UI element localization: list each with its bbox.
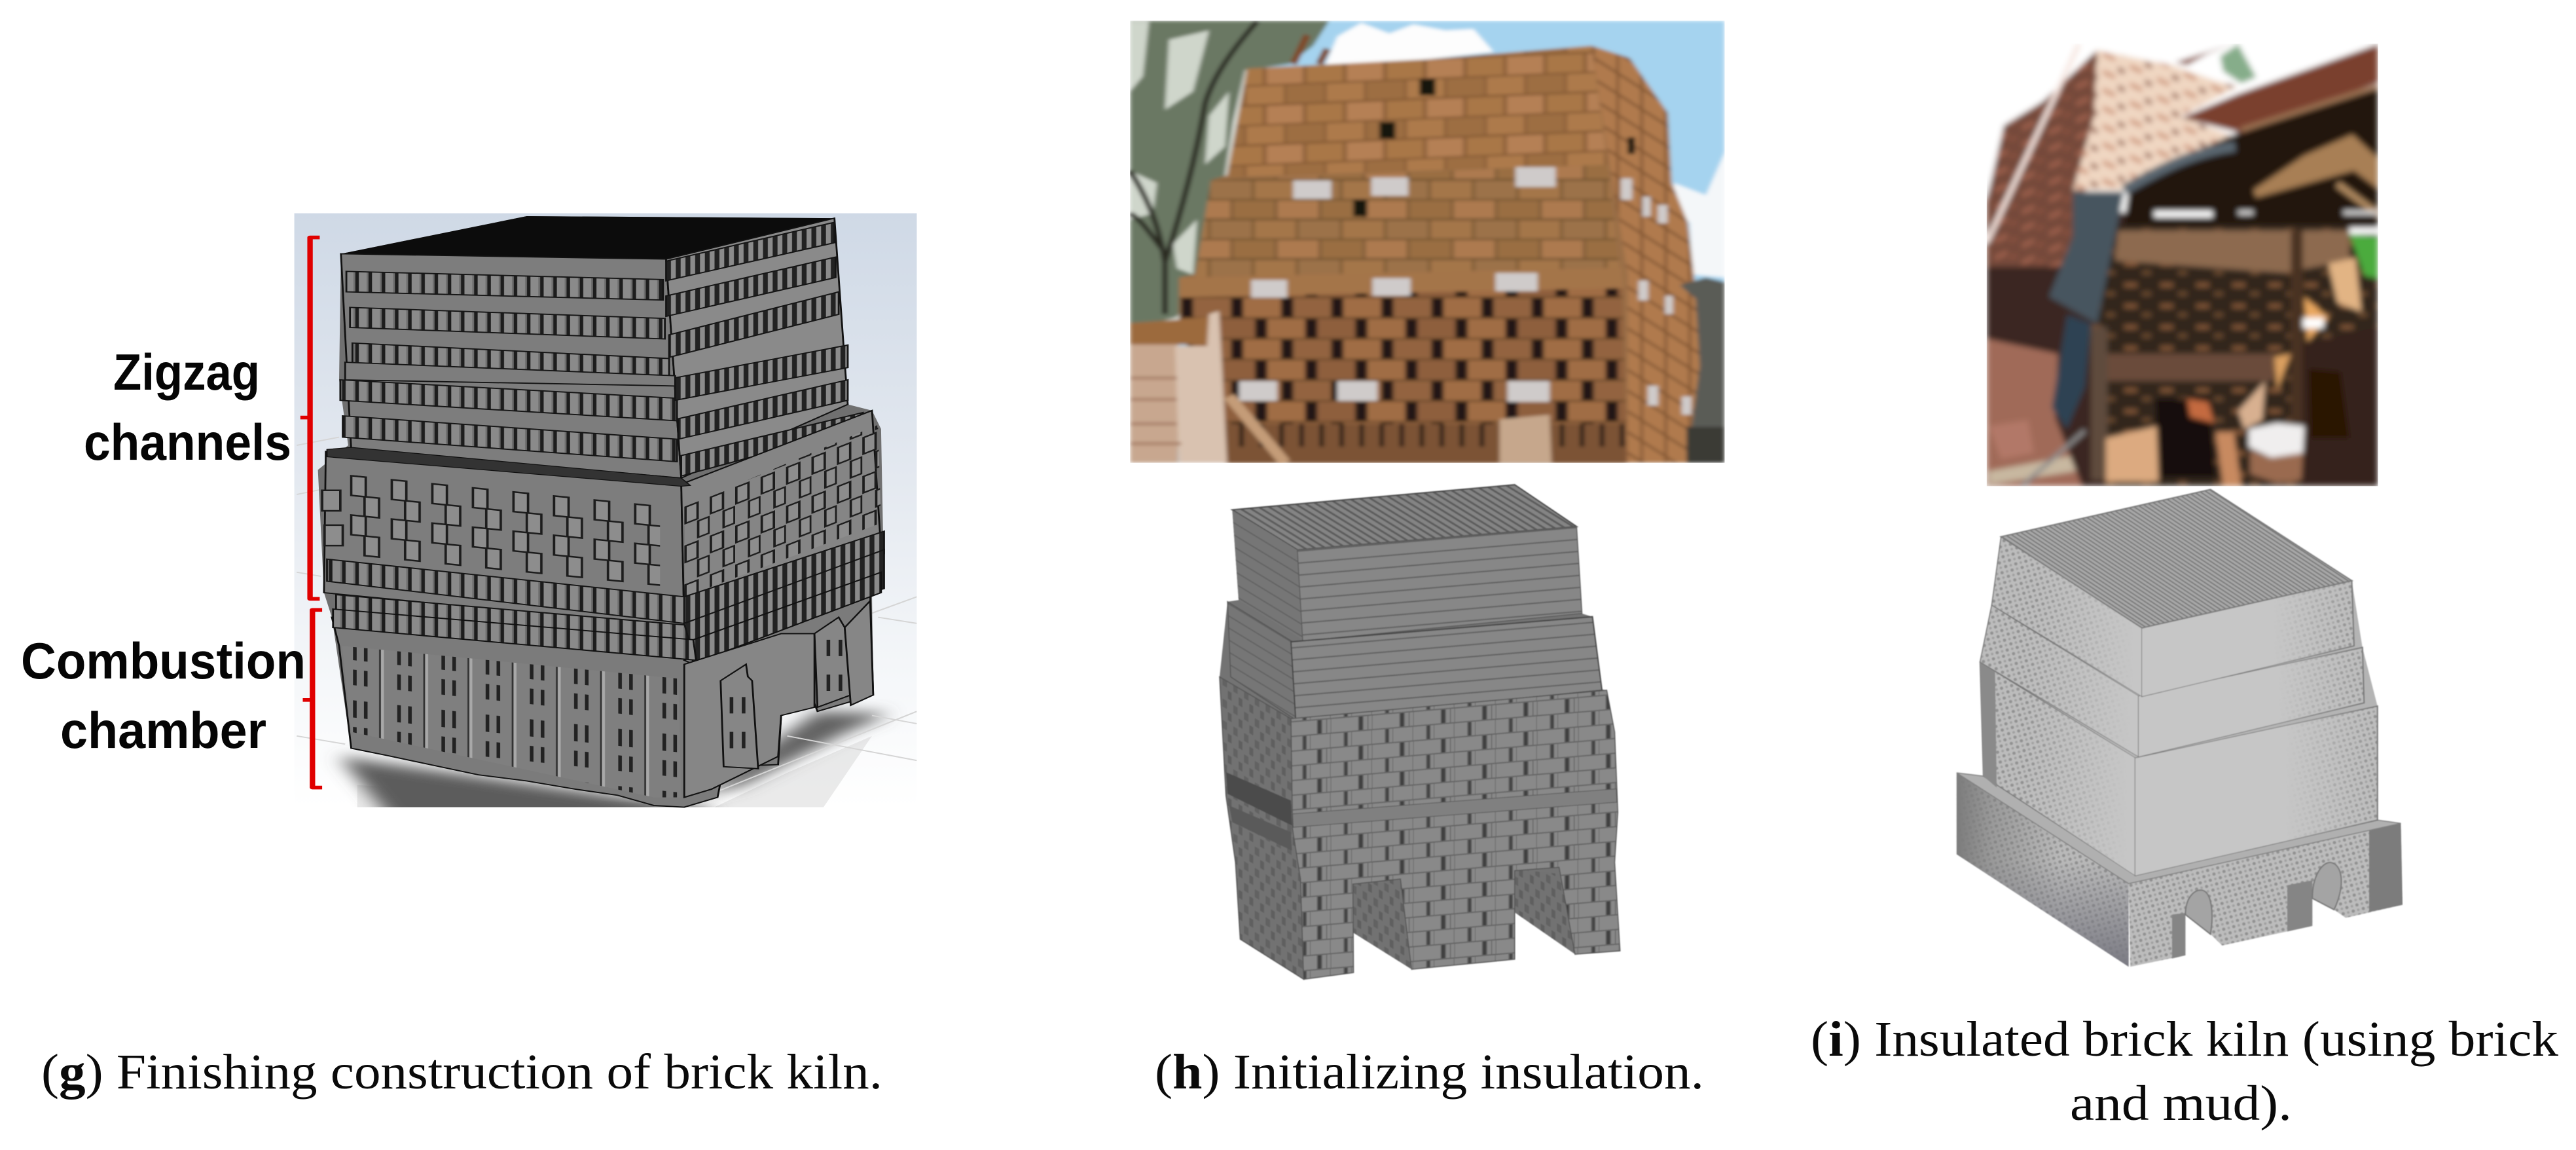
arch left [2185, 890, 2212, 934]
label: Combustion chamber: chamber [60, 701, 266, 759]
tarp [2049, 191, 2124, 324]
label: Zigzag channels [84, 343, 291, 471]
combustion chamber base [332, 576, 881, 807]
sun patches [2304, 297, 2329, 342]
photo h: brick kiln with insulation starting [1130, 21, 1725, 464]
lower wall backing [1986, 208, 2133, 486]
upper channel rows [340, 222, 863, 476]
caption i: (i) Insulated brick kiln (using brick [1811, 1012, 2558, 1067]
white box [2249, 423, 2304, 458]
floor shadow and reflection [297, 437, 916, 822]
chamber throat row right [693, 572, 881, 662]
kiln model [318, 216, 884, 807]
kiln right side [1591, 46, 1702, 463]
silhouette backing [1220, 485, 1618, 946]
kiln model i: fully insulated [1957, 489, 2403, 967]
second tier front [1291, 617, 1602, 720]
highlighted ledge bricks [1179, 268, 1624, 297]
block 1 left [1991, 537, 2142, 696]
bottom channel rows of middle block [327, 531, 884, 646]
green foliage [2349, 234, 2378, 279]
base front pillars [2172, 913, 2185, 959]
base front right corner [2369, 823, 2403, 912]
base front [2129, 823, 2403, 967]
silhouette backing [1957, 489, 2401, 885]
corrugated roof [2181, 45, 2378, 133]
main dark wall [2091, 225, 2378, 486]
label: Zigzag channels: Zigzag [113, 343, 260, 401]
kiln front: middle tier [1195, 164, 1620, 278]
label: Combustion chamber [21, 632, 306, 759]
kiln model h: partially insulated [1220, 485, 1620, 979]
right chamber pillars [684, 601, 873, 798]
top tier front [1297, 527, 1582, 641]
top with channels [2001, 489, 2351, 628]
top ledge [327, 447, 690, 486]
top face with channels [1232, 485, 1576, 550]
dark under-roof [2124, 86, 2378, 225]
ground and openings [2303, 327, 2378, 486]
top face [341, 216, 835, 259]
kiln front: upper tier [1227, 46, 1608, 177]
rubble [1989, 420, 2034, 459]
block 2 front [2139, 648, 2364, 756]
upper block front [341, 254, 681, 478]
scaffold pole [1987, 45, 2079, 242]
caption g: (g) Finishing construction of brick kiln. [41, 1045, 882, 1100]
left wall [1987, 50, 2097, 267]
zigzag channels front [350, 475, 660, 589]
combustion chamber pillars [342, 646, 681, 798]
kiln silhouette backing [318, 216, 884, 807]
kiln front: lower tier with gaps [1178, 287, 1627, 426]
block 1 front [2142, 581, 2354, 696]
kiln front backing [1184, 164, 1629, 399]
photo i: insulated kiln [1987, 44, 2378, 486]
wooden frame [1130, 344, 1178, 463]
zigzag channels right [684, 425, 881, 597]
posts [2091, 327, 2107, 480]
block 3 left edge [1980, 662, 1997, 788]
upper block right face [666, 218, 848, 478]
chamber throat row [333, 609, 697, 660]
arch right [2312, 862, 2342, 910]
middle block right face [681, 411, 881, 627]
dark holes [1353, 79, 1635, 217]
wooden beams [2253, 134, 2378, 198]
viewport background [295, 213, 916, 807]
base inner notches [1353, 876, 1411, 969]
white marked bricks [1239, 167, 1692, 415]
plain belt course [1292, 788, 1617, 827]
caption i: and mud). [2070, 1076, 2292, 1131]
block 2 left [1980, 605, 2139, 756]
label: Combustion chamber: Combustion [21, 632, 306, 690]
caption i [1811, 1012, 2558, 1131]
dark band on left side [1226, 772, 1292, 826]
ledge between base and block 3 [1957, 773, 2401, 883]
block 3 front [2135, 706, 2378, 876]
block 3 left [1980, 662, 2135, 876]
shed at right [1679, 276, 1724, 431]
panel g: finished kiln model [295, 213, 916, 822]
top tier left face [1232, 510, 1303, 640]
base left side with brick courses [1220, 677, 1303, 979]
base front brickwork [1291, 690, 1620, 979]
left stub channels [322, 491, 343, 546]
middle block front [324, 451, 684, 627]
caption h: (h) Initializing insulation. [1155, 1045, 1704, 1100]
base left [1957, 773, 2129, 967]
second tier left [1227, 602, 1296, 720]
bracket: zigzag channels [300, 237, 319, 599]
front pale brick [1500, 415, 1551, 463]
label: Zigzag channels: channels [84, 413, 291, 471]
right pillar slots [730, 640, 843, 748]
sunlit brick face [2073, 50, 2240, 190]
bracket: combustion chamber [302, 610, 322, 787]
